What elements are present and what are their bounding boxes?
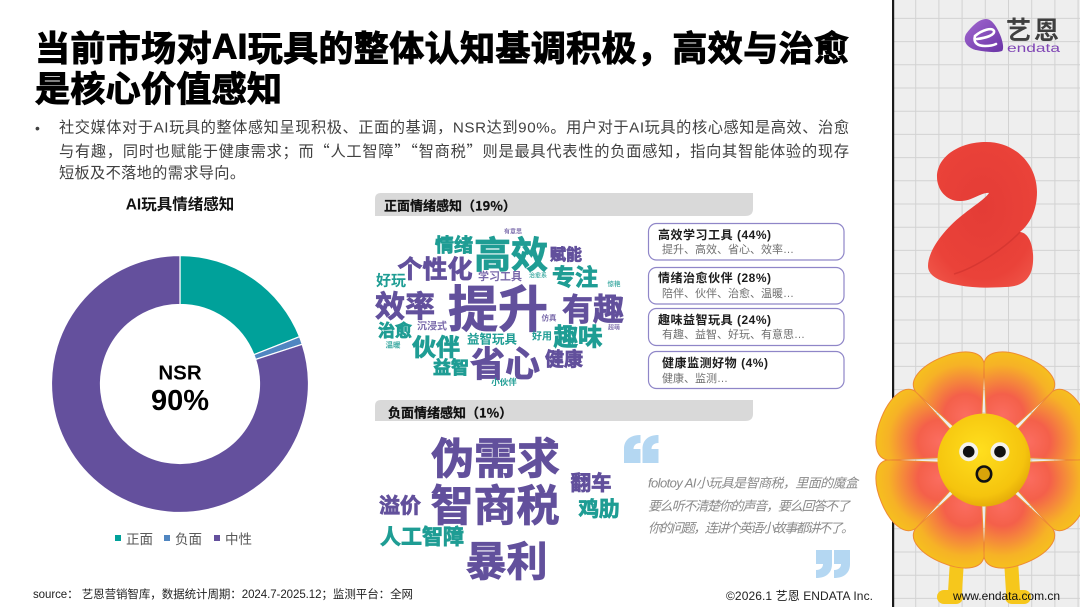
text block: user quote: folotoy AI小玩具是智商税，里面的魔盒 bbox=[648, 476, 860, 490]
card: fun educational toy bbox=[648, 308, 844, 346]
word cloud: positive: 温暖 bbox=[386, 340, 401, 350]
text block: summary paragraph: 短板及不落地的需求导向。 bbox=[59, 161, 245, 183]
icon: closing quote mark bbox=[816, 550, 850, 578]
word cloud: negative bbox=[379, 425, 620, 588]
text block: summary paragraph bbox=[35, 118, 849, 183]
word cloud: positive: 有意思 bbox=[504, 226, 522, 236]
donut segment: neutral bbox=[51, 255, 308, 512]
card: efficient learning tool: 高效学习工具 (44%) bbox=[658, 227, 771, 242]
icon: brand logo: 艺恩 bbox=[1006, 11, 1059, 47]
word cloud: positive: 益智玩具 bbox=[467, 328, 517, 348]
word cloud: negative: 溢价 bbox=[379, 490, 421, 520]
icon: brand logo bbox=[965, 11, 1060, 55]
card: efficient learning tool: 提升、高效、省心、效率… bbox=[662, 242, 794, 256]
word cloud: positive: 小伙伴 bbox=[491, 376, 517, 388]
card: fun educational toy: 趣味益智玩具 (24%) bbox=[658, 312, 771, 327]
section header: positive sentiment: 正面情绪感知（19%） bbox=[384, 196, 516, 214]
word cloud: positive: 惊艳 bbox=[608, 278, 621, 288]
icon: flower character bbox=[867, 343, 1080, 597]
center label: NSR: NSR bbox=[158, 362, 202, 384]
card: emotional healing companion: 情绪治愈伙伴 (28%) bbox=[658, 270, 771, 285]
text block: user quote: 你的问题，连讲个英语小故事都讲不了。 bbox=[648, 518, 854, 536]
word cloud: positive: 健康 bbox=[545, 344, 583, 372]
text block: user quote bbox=[648, 476, 860, 536]
text block: user quote: 要么听不清楚你的声音，要么回答不了 bbox=[648, 496, 851, 514]
word cloud: positive: 益智 bbox=[433, 354, 469, 380]
section header: negative sentiment bbox=[375, 400, 753, 422]
word cloud: positive: 省心 bbox=[470, 336, 540, 388]
icon: red number 2 bbox=[928, 142, 1037, 288]
word cloud: positive: 仿真 bbox=[542, 312, 557, 324]
text block: summary paragraph: 与有趣，同时也赋能于健康需求；而“人工智障”“智商税”则是最具代表性的负面感知，指向其智能体验的现存 bbox=[59, 140, 849, 162]
text block: summary paragraph: • bbox=[35, 120, 40, 136]
word cloud: negative: 智商税 bbox=[430, 472, 560, 534]
character petals bbox=[875, 351, 1080, 569]
word cloud: positive: 沉浸式 bbox=[417, 318, 447, 332]
word cloud: positive: 伙伴 bbox=[412, 328, 460, 362]
word cloud: positive: 好用 bbox=[532, 328, 552, 342]
donut chart: AI toy sentiment bbox=[51, 194, 308, 548]
word cloud: positive: 提升 bbox=[448, 270, 548, 342]
word cloud: positive bbox=[375, 225, 624, 388]
title bbox=[35, 21, 849, 112]
card: fun educational toy: 有趣、益智、好玩、有意思… bbox=[662, 327, 805, 341]
center label: NSR: 90% bbox=[151, 385, 209, 417]
section header: positive sentiment bbox=[375, 193, 753, 216]
word cloud: positive: 效率 bbox=[375, 282, 435, 326]
chart legend: 正面 bbox=[126, 528, 153, 548]
text block: summary paragraph: 社交媒体对于AI玩具的整体感知呈现积极、正面的基调，NSR达到90%。用户对于AI玩具的核心感知是高效、治愈 bbox=[59, 118, 849, 136]
chart legend: 中性 bbox=[225, 528, 252, 548]
character legs bbox=[944, 560, 1024, 597]
card: health monitoring: 健康监测好物 (4%) bbox=[662, 355, 768, 370]
word cloud: positive: 学习工具 bbox=[478, 268, 522, 284]
word cloud: negative: 翻车 bbox=[570, 466, 612, 496]
footer: website: www.endata.com.cn bbox=[952, 589, 1060, 603]
panel: right decorative grid background bbox=[892, 0, 1080, 607]
card: emotional healing companion bbox=[648, 268, 844, 304]
word cloud: positive: 好玩 bbox=[376, 270, 406, 290]
title: 当前市场对AI玩具的整体认知基调积极，高效与治愈 bbox=[35, 21, 849, 72]
chart title: AI玩具情绪感知 bbox=[126, 194, 234, 214]
word cloud: negative: 鸡肋 bbox=[578, 492, 620, 522]
word cloud: positive: 情绪 bbox=[435, 230, 473, 258]
word cloud: positive: 高效 bbox=[474, 225, 548, 279]
word cloud: positive: 趣味 bbox=[554, 318, 602, 354]
donut segment: negative bbox=[254, 337, 302, 359]
chart legend bbox=[115, 528, 252, 548]
word cloud: positive: 个性化 bbox=[397, 250, 473, 286]
word cloud: positive: 治愈 bbox=[378, 316, 412, 342]
word cloud: positive: 专注 bbox=[552, 258, 598, 292]
word cloud: positive: 赋能 bbox=[550, 241, 582, 265]
character face bbox=[938, 414, 1030, 506]
card: health monitoring: 健康、监测… bbox=[662, 371, 728, 385]
footer: copyright: ©2026.1 艺恩 ENDATA Inc. bbox=[726, 589, 873, 603]
donut segment: positive bbox=[180, 255, 300, 355]
center label: NSR bbox=[151, 362, 209, 417]
icon: opening quote mark bbox=[624, 435, 658, 463]
word cloud: negative: 伪需求 bbox=[431, 425, 560, 487]
title: 是核心价值感知 bbox=[35, 62, 282, 112]
word cloud: negative: 暴利 bbox=[466, 528, 548, 588]
word cloud: positive: 超萌 bbox=[608, 322, 620, 332]
section header: negative sentiment: 负面情绪感知（1%） bbox=[388, 402, 512, 422]
footer: source note: source： 艺恩营销智库，数据统计周期：2024.7-2025.12；监测平台：全网 bbox=[33, 587, 413, 601]
card: emotional healing companion: 陪伴、伙伴、治愈、温暖… bbox=[662, 286, 794, 300]
word cloud: negative: 人工智障 bbox=[380, 521, 464, 551]
word cloud: positive: 治愈系 bbox=[529, 270, 547, 280]
card: efficient learning tool bbox=[648, 224, 844, 260]
icon: brand logo: endata bbox=[1007, 41, 1060, 55]
chart legend: 负面 bbox=[175, 528, 202, 548]
card: health monitoring bbox=[648, 352, 844, 388]
word cloud: positive: 有趣 bbox=[562, 284, 624, 330]
